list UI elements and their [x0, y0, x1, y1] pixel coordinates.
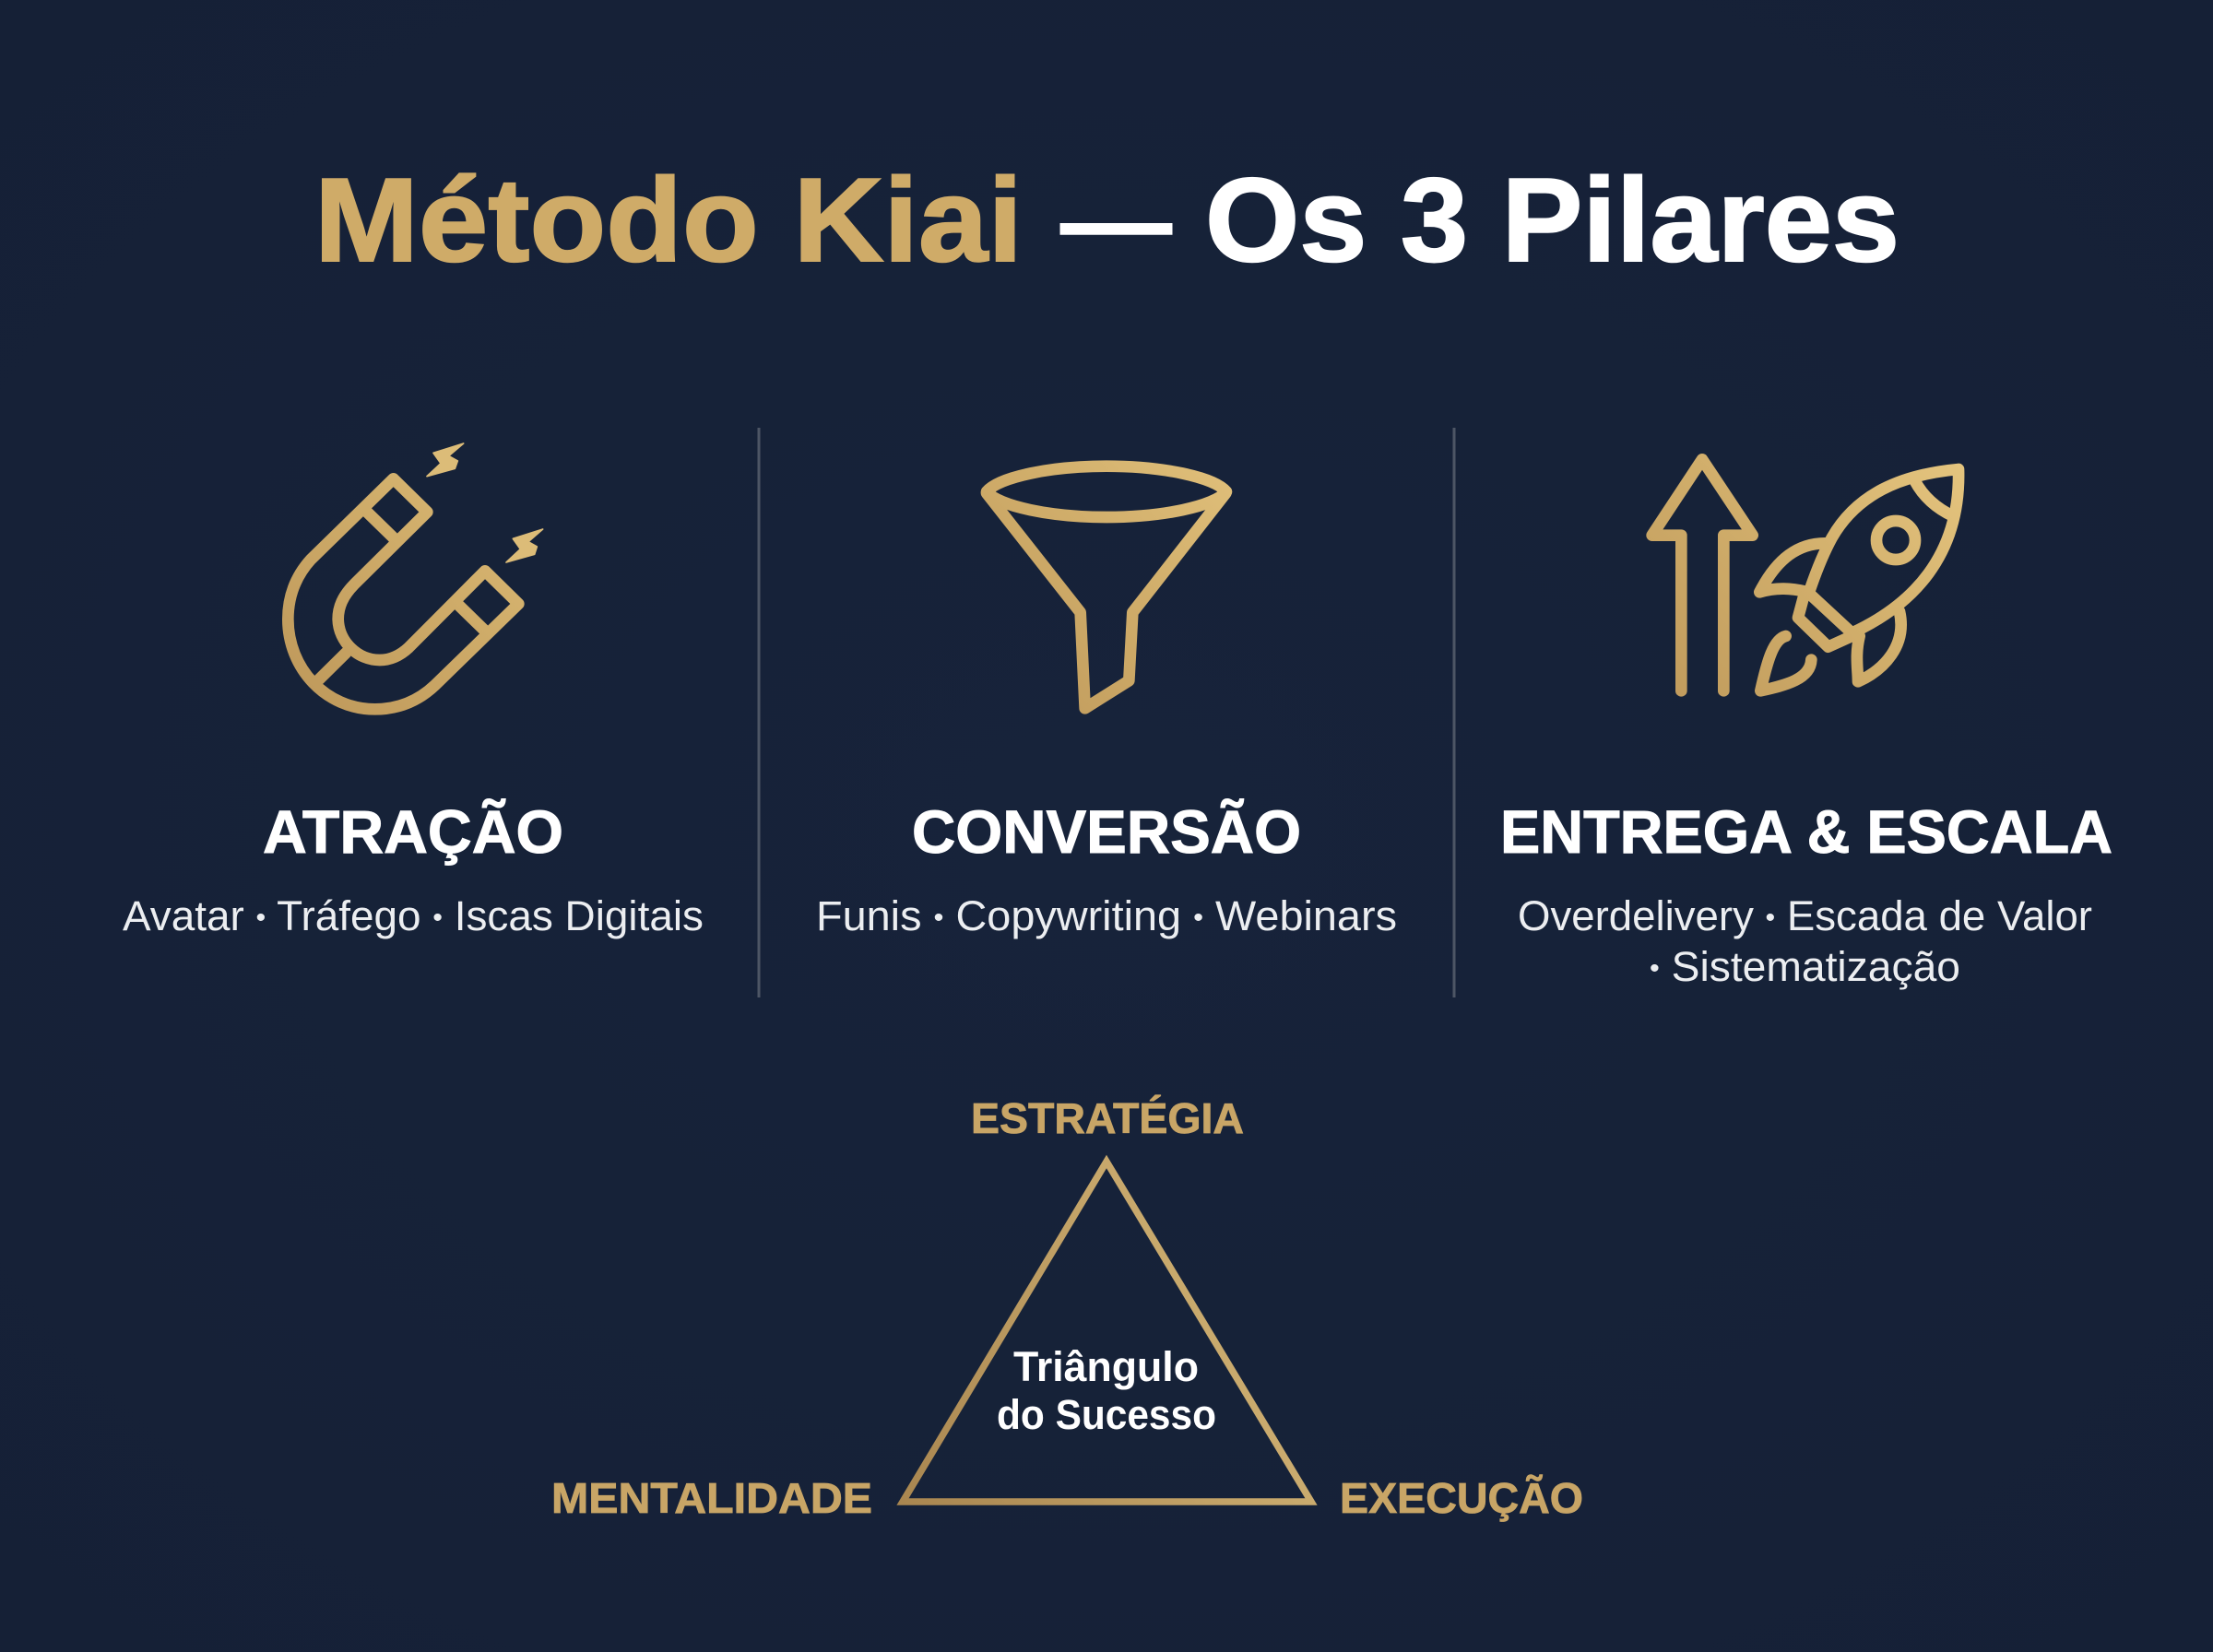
text: triangle center: Triângulo [1013, 1343, 1199, 1390]
text: conversão items: • [1193, 903, 1203, 933]
title: Método Kiai [314, 154, 1023, 287]
triangle [903, 1162, 1311, 1502]
text: conversão items: Funis [816, 892, 917, 939]
icon: arrow and rocket [1652, 459, 1959, 690]
panel: entrega e escala [1500, 459, 2112, 990]
text: entrega items: • [1650, 953, 1660, 984]
text: atração items: Tráfego [266, 892, 432, 939]
panel: atração [123, 443, 704, 939]
icon: magnet [288, 443, 543, 709]
text: atração items: • [432, 903, 443, 933]
text: entrega items: Overdelivery [1518, 892, 1751, 939]
panel: conversão [816, 466, 1397, 939]
text: entrega items: Escada de Valor [1775, 892, 2092, 939]
diagram: triângulo do sucesso [551, 1094, 1583, 1522]
text: atração items: • [256, 903, 266, 933]
text: atração items: Avatar [123, 892, 242, 939]
text: triangle center [997, 1343, 1216, 1438]
title: — [1060, 154, 1173, 287]
label: estratégia: ESTRATÉGIA [971, 1094, 1244, 1142]
divider left [758, 428, 760, 997]
label: execução: EXECUÇÃO [1340, 1474, 1583, 1522]
text: entrega items: • [1766, 903, 1775, 933]
heading: atração: ATRAÇÃO [263, 797, 563, 866]
text: entrega items: Sistematização [1660, 943, 1960, 990]
text: conversão items: • [934, 903, 943, 933]
heading: entrega e escala: ENTREGA & ESCALA [1500, 797, 2112, 866]
heading: conversão: CONVERSÃO [912, 797, 1301, 866]
title: Os 3 Pilares [1205, 154, 1899, 287]
text: entrega items [1518, 892, 2092, 990]
divider right [1453, 428, 1455, 997]
text: conversão items: Copywriting [943, 892, 1193, 939]
label: mentalidade: MENTALIDADE [551, 1474, 872, 1522]
text: conversão items: Webinars [1203, 892, 1397, 939]
text: atração items: Iscas Digitais [443, 892, 704, 939]
text: triangle center: do Sucesso [997, 1391, 1216, 1438]
title [314, 154, 1899, 287]
icon: funnel [987, 466, 1226, 708]
